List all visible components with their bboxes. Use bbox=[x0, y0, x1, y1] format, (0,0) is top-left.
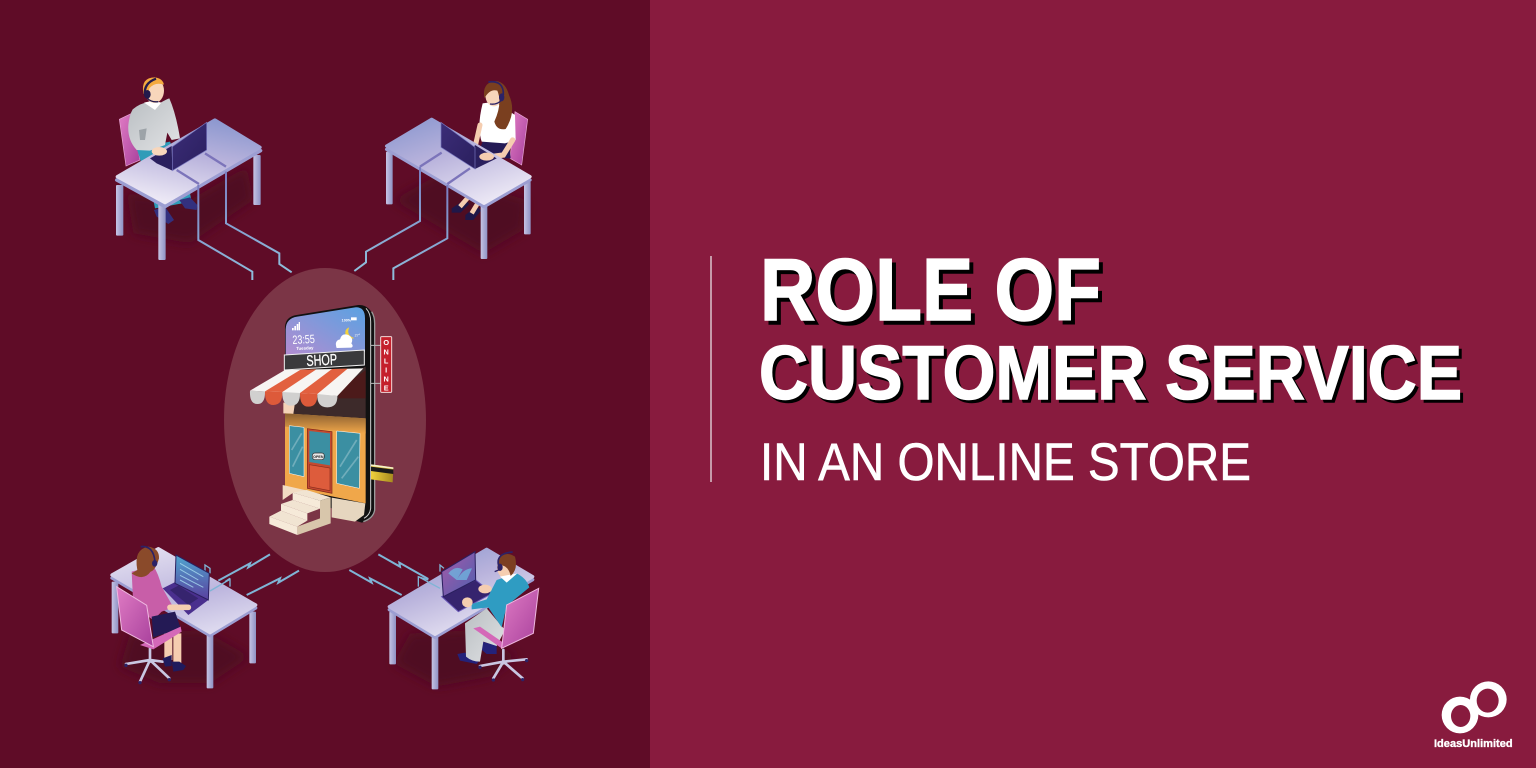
desk: bottom-right agent bbox=[389, 549, 539, 689]
phone screen: 100% bbox=[342, 319, 352, 323]
heading: ROLE OF: ROLE OF bbox=[760, 240, 1101, 339]
shop windows bbox=[289, 426, 360, 488]
desk: bottom-left agent bbox=[112, 547, 256, 688]
online hanging sign bbox=[371, 337, 392, 392]
agent: woman in white shirt bbox=[452, 81, 516, 220]
laptop bbox=[441, 122, 497, 169]
table bbox=[389, 549, 533, 689]
laptop bbox=[150, 122, 207, 171]
online hanging sign: O bbox=[383, 338, 389, 347]
online hanging sign: L bbox=[384, 357, 389, 366]
desk: top-right agent bbox=[386, 81, 531, 259]
panel: left dark background bbox=[0, 0, 650, 768]
phone screen: 23:55 bbox=[292, 332, 315, 347]
online hanging sign: E bbox=[384, 383, 389, 392]
online hanging sign: N bbox=[384, 374, 389, 383]
online hanging sign: I bbox=[385, 366, 387, 375]
subheading: IN AN ONLINE STORE bbox=[760, 433, 1251, 492]
connector wires: bottom-right desk bbox=[349, 554, 428, 595]
dark shop front band bbox=[283, 367, 366, 418]
shop door: OPEN bbox=[313, 455, 324, 459]
phone screen: Tuesday bbox=[296, 345, 314, 351]
heading: ROLE OF: ROLE OF bbox=[764, 244, 1105, 343]
heading: CUSTOMER SERVICE: CUSTOMER SERVICE bbox=[759, 331, 1462, 416]
online hanging sign: N bbox=[384, 347, 389, 356]
phone screen bbox=[286, 307, 365, 357]
laptop bbox=[442, 552, 492, 612]
shop facade bbox=[285, 413, 366, 503]
agent: man in grey sweater bbox=[128, 77, 197, 224]
shop door bbox=[307, 429, 332, 493]
table bbox=[386, 119, 531, 259]
desk: top-left agent bbox=[116, 77, 261, 260]
title block bbox=[759, 240, 1465, 492]
phone body bbox=[285, 305, 375, 523]
agent: man in teal sweater, seated on chair bbox=[457, 552, 539, 682]
laptop bbox=[163, 555, 209, 615]
divider line bbox=[710, 256, 712, 482]
icon: phone shaped as shop bbox=[250, 305, 393, 535]
center circle highlight bbox=[224, 268, 426, 572]
logo rings bbox=[1442, 681, 1507, 733]
heading: CUSTOMER SERVICE: CUSTOMER SERVICE bbox=[762, 334, 1465, 419]
shop sign bbox=[284, 350, 364, 370]
panel: right background bbox=[650, 0, 1536, 768]
connector wires: top-left desk bbox=[198, 172, 292, 280]
connector wires: top-right desk bbox=[354, 167, 447, 280]
shop sign: SHOP bbox=[306, 351, 337, 370]
connector wires: bottom-left desk bbox=[218, 554, 299, 595]
chair back bbox=[119, 113, 140, 166]
chair back bbox=[510, 112, 528, 165]
striped awning bbox=[250, 368, 363, 407]
logo: Ideas Unlimited bbox=[1434, 681, 1513, 750]
credit card bbox=[371, 464, 393, 482]
shop base and steps bbox=[269, 485, 365, 535]
phone screen: 27° bbox=[355, 334, 361, 338]
logo wordmark: IdeasUnlimited bbox=[1434, 738, 1513, 750]
table bbox=[112, 549, 256, 688]
table bbox=[116, 120, 261, 260]
agent: woman in pink top, seated on chair bbox=[117, 547, 188, 684]
